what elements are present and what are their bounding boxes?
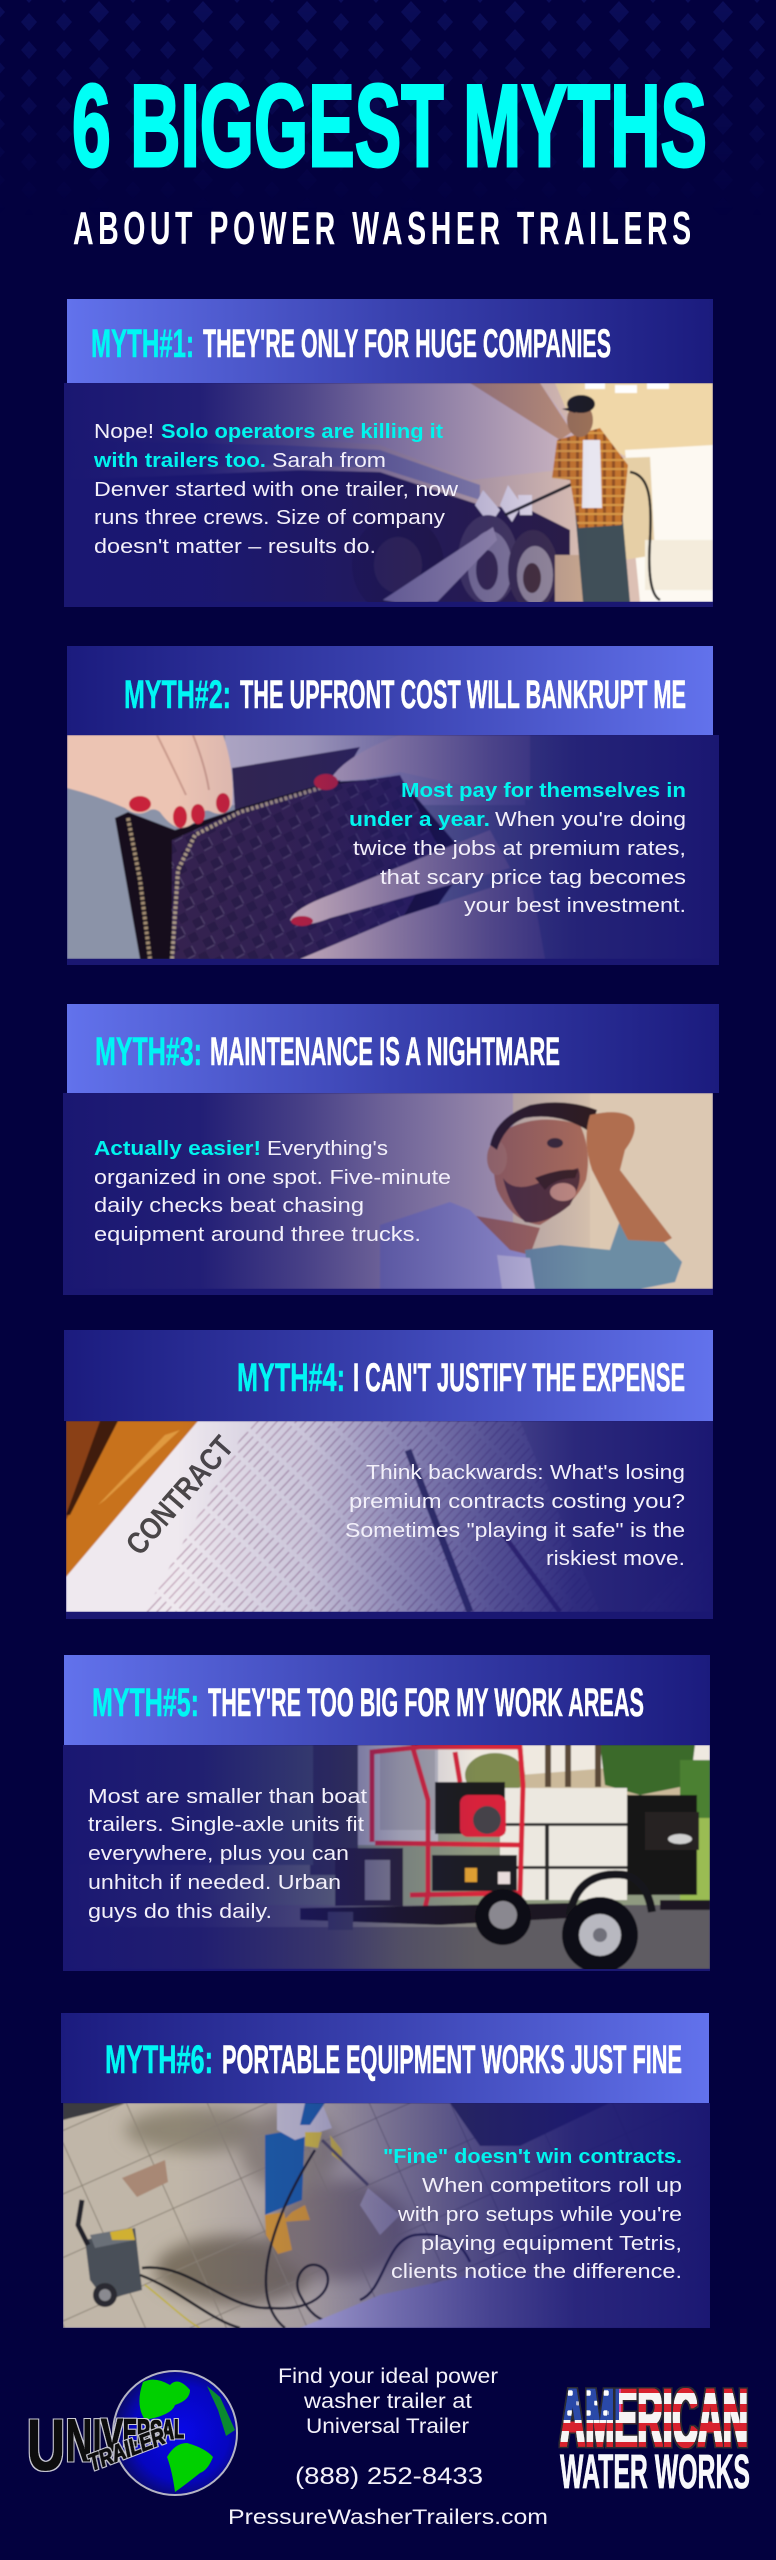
footer contact text: Find your ideal power — [278, 2365, 498, 2388]
heading: MYTH#2: — [124, 673, 231, 717]
heading — [237, 1356, 685, 1400]
panel: myth 4 — [64, 1330, 719, 1619]
panel: myth 3 — [63, 1004, 719, 1295]
heading: MYTH#4: — [237, 1356, 345, 1400]
phone number: (888) 252-8433 — [295, 2463, 483, 2490]
body text — [88, 1785, 367, 1923]
body text: Think backwards: What's losing — [366, 1461, 685, 1484]
body text: daily checks beat chasing — [94, 1194, 364, 1217]
icon: globe — [113, 2371, 237, 2495]
body text: "Fine" doesn't win contracts. — [383, 2145, 682, 2168]
body text: Most are smaller than boat — [88, 1785, 367, 1808]
body text: Denver started with one trailer, now — [94, 478, 458, 501]
heading: MYTH#1: — [91, 322, 194, 366]
photo: worker washing tanker truck — [176, 383, 713, 602]
body text: When you're doing — [495, 808, 686, 831]
body text: When competitors roll up — [422, 2174, 682, 2197]
body text — [94, 1137, 451, 1246]
body text: Actually easier! — [94, 1137, 261, 1160]
body text: Nope! — [94, 420, 154, 443]
header bar — [67, 299, 713, 383]
body text: guys do this daily. — [88, 1900, 272, 1923]
fade overlay — [205, 735, 719, 959]
diamond pattern backdrop — [0, 0, 765, 154]
body text — [93, 420, 458, 558]
header bar — [61, 2013, 709, 2103]
panel: myth 6 — [61, 2013, 710, 2328]
wordmark: UNIVERSAL: S — [150, 2415, 162, 2448]
heading — [91, 322, 611, 366]
body text: that scary price tag becomes — [380, 866, 686, 889]
body text: clients notice the difference. — [391, 2260, 682, 2283]
wordmark: UNIVERSAL: U — [27, 2406, 65, 2486]
body text: runs three crews. Size of company — [94, 506, 446, 529]
subtitle: ABOUT POWER WASHER TRAILERS — [73, 203, 691, 255]
website: PressureWasherTrailers.com — [228, 2506, 548, 2529]
wordmark: UNIVERSAL: A — [162, 2414, 174, 2445]
body text: doesn't matter – results do. — [94, 535, 376, 558]
body text: Everything's — [267, 1137, 388, 1160]
photo: contract and pens — [66, 1421, 719, 1612]
body text: trailers. Single-axle units fit — [88, 1813, 364, 1836]
header bar — [67, 1004, 719, 1093]
fade overlay — [205, 1421, 713, 1612]
body text: playing equipment Tetris, — [421, 2232, 682, 2255]
heading — [124, 673, 686, 717]
heading — [92, 1681, 644, 1725]
body text: under a year. — [349, 808, 490, 831]
body text: everywhere, plus you can — [88, 1842, 349, 1865]
heading: MYTH#3: — [95, 1030, 202, 1074]
heading — [105, 2038, 682, 2082]
photo: stressed man wiping forehead — [198, 1093, 713, 1289]
logo: Universal Trailer — [27, 2371, 237, 2495]
fade overlay — [63, 1745, 462, 1969]
footer contact text: Universal Trailer — [306, 2415, 469, 2438]
body text: riskiest move. — [546, 1547, 685, 1570]
wordmark: UNIVERSAL: N — [66, 2407, 92, 2474]
photo: worker with portable pressure washer — [63, 2103, 710, 2328]
heading — [95, 1030, 560, 1074]
wordmark: UNIVERSAL: R — [137, 2413, 150, 2451]
header bar — [64, 1655, 710, 1745]
wordmark: UNIVERSAL: V — [101, 2409, 123, 2461]
fade overlay — [64, 383, 574, 602]
panel: myth 5 — [63, 1655, 710, 1973]
footer contact text — [228, 2365, 548, 2529]
logo: American Water Works — [560, 2373, 750, 2499]
body text — [345, 1461, 685, 1570]
body text: your best investment. — [464, 894, 686, 917]
footer contact text: washer trailer at — [303, 2390, 472, 2413]
body text: unhitch if needed. Urban — [88, 1871, 341, 1894]
body text: with pro setups while you're — [397, 2203, 682, 2226]
body text: Sometimes "playing it safe" is the — [345, 1519, 685, 1542]
header bar — [64, 1330, 713, 1421]
wordmark: UNIVERSAL: L — [174, 2414, 184, 2444]
panel: myth 2 — [67, 646, 719, 965]
body text: with trailers too. — [93, 449, 266, 472]
heading: MYTH#5: — [92, 1681, 199, 1725]
body text: premium contracts costing you? — [349, 1490, 685, 1513]
body text: Sarah from — [272, 449, 386, 472]
body text — [383, 2145, 682, 2283]
wordmark: UNIVERSAL: I — [93, 2409, 101, 2468]
wordmark: TRAILER: TRAILER — [84, 2423, 169, 2476]
fade overlay — [63, 1093, 572, 1289]
fade overlay — [213, 2103, 710, 2328]
body text: Most pay for themselves in — [401, 779, 686, 802]
body text: equipment around three trucks. — [94, 1223, 421, 1246]
contract word on paper: CONTRACT — [119, 1429, 240, 1562]
wordmark: UNIVERSAL — [27, 2406, 184, 2486]
photo: hands opening wallet — [67, 735, 626, 959]
body text: twice the jobs at premium rates, — [353, 837, 686, 860]
header bar — [67, 646, 713, 735]
body text: Solo operators are killing it — [161, 420, 443, 443]
photo: power washer trailer — [146, 1745, 710, 1969]
body text: organized in one spot. Five-minute — [94, 1166, 451, 1189]
panel: myth 1 — [64, 299, 713, 615]
wordmark: UNIVERSAL: E — [123, 2412, 137, 2455]
heading: MYTH#6: — [105, 2038, 213, 2082]
body text — [349, 779, 686, 917]
